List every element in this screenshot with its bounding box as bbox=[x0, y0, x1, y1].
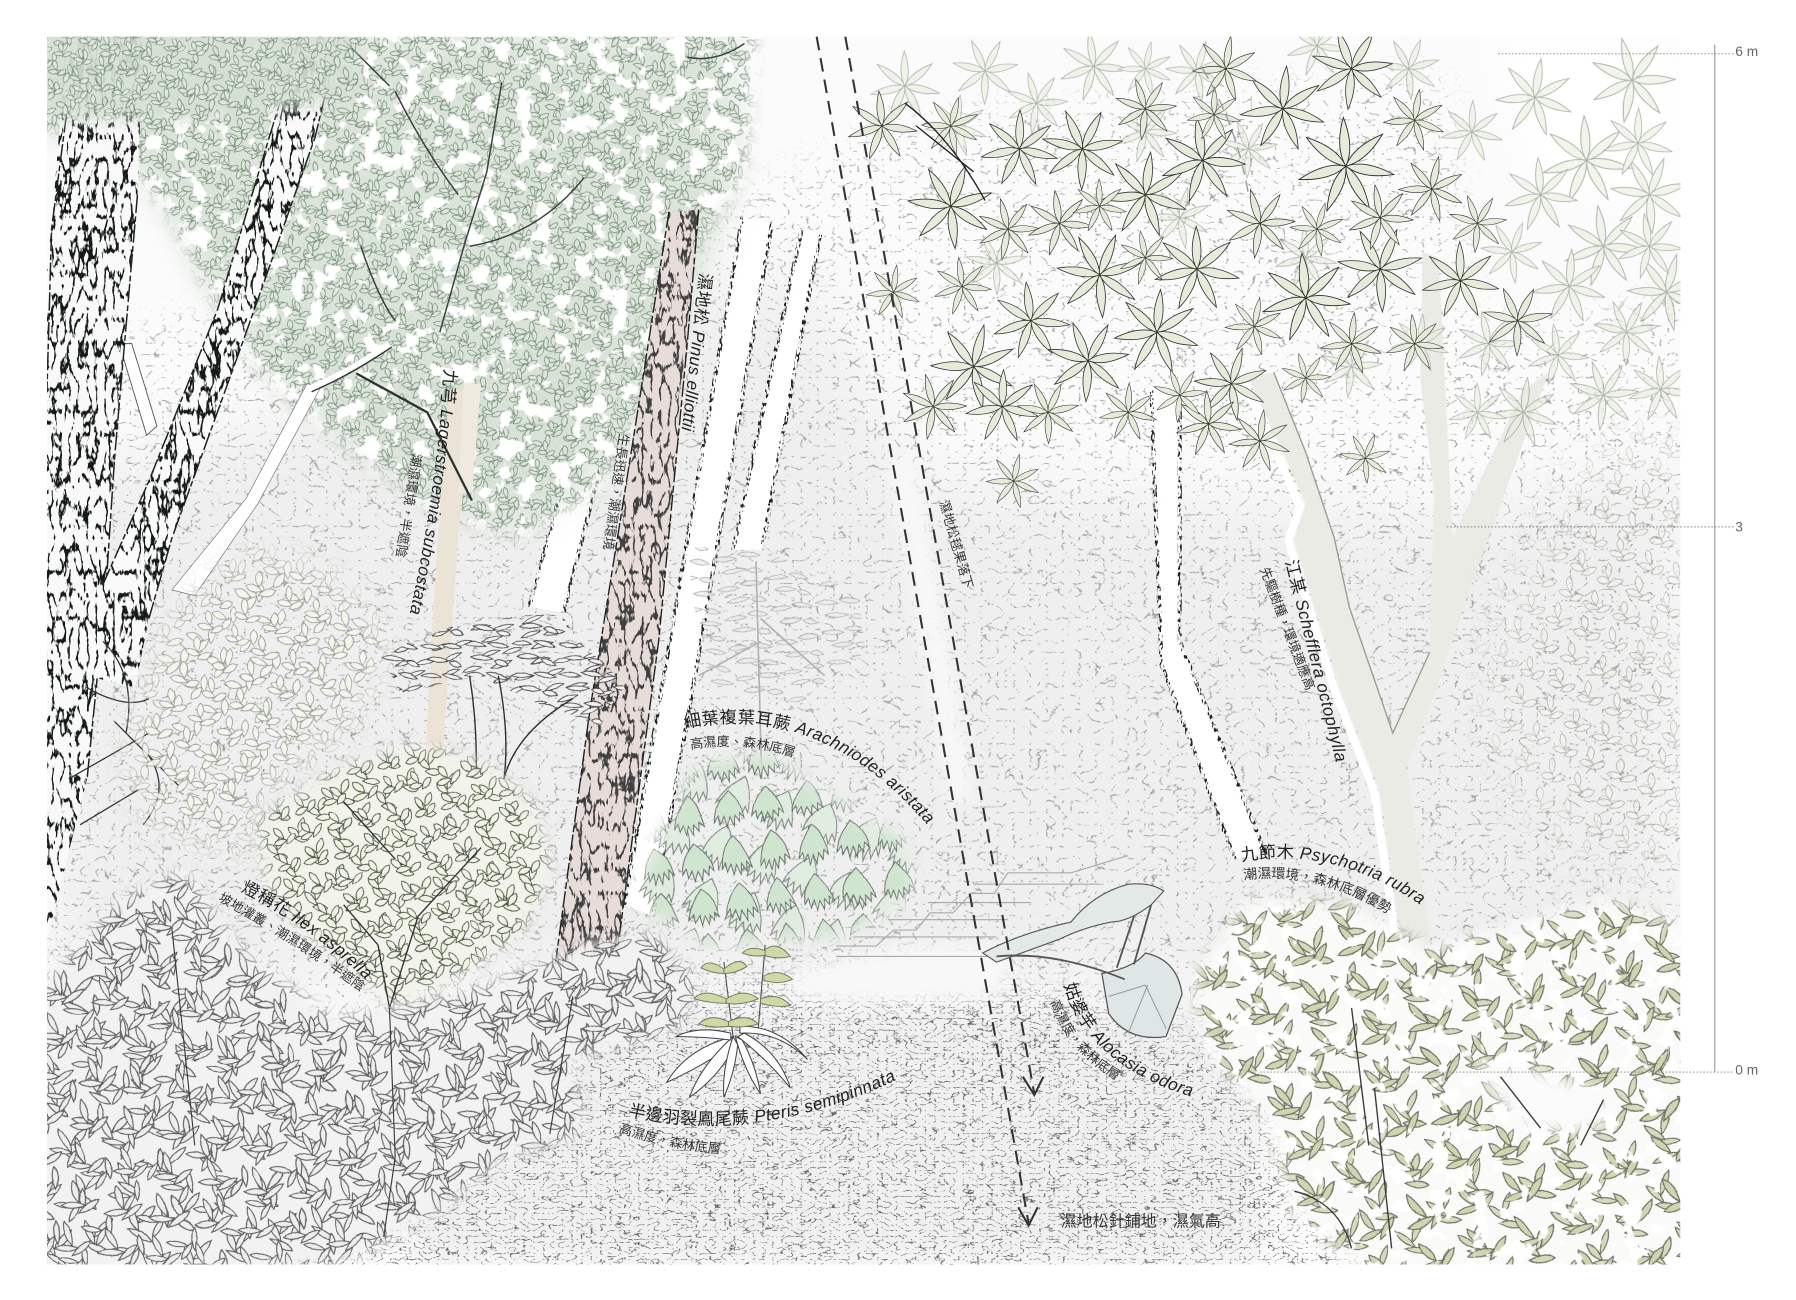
label: 3: 3 bbox=[1735, 519, 1743, 534]
trunk: left pine bbox=[46, 36, 143, 939]
Lagerstroemia trunk bbox=[425, 384, 481, 762]
note: Schefflera octophylla: 先驅樹種，環境適應高 bbox=[1259, 568, 1316, 690]
Ilex asprella shrub bbox=[229, 722, 573, 1031]
Arachniodes fern bbox=[619, 744, 939, 951]
trunk: diagonal pine bbox=[86, 37, 339, 687]
faint shrub behind Ilex bbox=[103, 538, 424, 882]
note: pine cones fall: 濕地松毬果落下 bbox=[939, 500, 974, 587]
undergrowth shrub (left, dark) bbox=[34, 848, 722, 1283]
label: Arachniodes aristata: 細葉複葉耳蕨 Arachniodes aristata bbox=[682, 707, 940, 828]
schefflera canopy: faded leaves bbox=[865, 11, 1719, 457]
pine needle fall: dashed line and arrow bbox=[817, 37, 1038, 1226]
note: Alocasia odora: 高濕度，森林底層 bbox=[1047, 998, 1123, 1083]
faint foliage (right edge) bbox=[1466, 412, 1684, 893]
green canopy (left) bbox=[47, 37, 780, 564]
label: Schefflera octophylla: 江某 Schefflera octophylla bbox=[1284, 560, 1346, 762]
dark sapling bbox=[378, 616, 624, 790]
label: Ilex asprella: 燈稱花 Ilex asprella bbox=[239, 877, 377, 983]
stone stairs bbox=[836, 856, 1128, 956]
canopy overlay on pine tops bbox=[47, 37, 368, 140]
Pinus elliottii trunk (pink) bbox=[554, 210, 699, 985]
label: Pinus elliottii: 濕地松 Pinus elliottii bbox=[682, 274, 714, 432]
Psychotria rubra shrub (right, olive) bbox=[1180, 882, 1707, 1294]
note: Psychotria rubra: 潮濕環境，森林底層優勢 bbox=[1243, 866, 1394, 917]
note: pine needle ground cover: 濕地松針鋪地，濕氣高 bbox=[1061, 1213, 1221, 1231]
trunk: tangled base lines at left bbox=[69, 641, 183, 825]
label: Lagerstroemia subcostata: 九芎 Lagerstroemia subcostata bbox=[410, 369, 458, 614]
label: 6 m: 6 m bbox=[1735, 44, 1758, 59]
dark branches in canopy bbox=[905, 69, 1248, 200]
height scale bbox=[1260, 44, 1758, 1077]
note: Pteris semipinnata: 高濕度，森林底層 bbox=[618, 1120, 722, 1156]
Pteris semipinnata bbox=[667, 945, 808, 1097]
note: Ilex asprella: 坡地灌叢、潮濕環境，半遮陰 bbox=[216, 890, 368, 994]
Alocasia odora bbox=[983, 884, 1182, 1038]
label: Pteris semipinnata: 半邊羽裂鳳尾蕨 Pteris semipinnata bbox=[627, 1065, 898, 1129]
schefflera canopy: dark leaf clusters bbox=[844, 13, 1567, 517]
falling pine cones: dashed line and arrow bbox=[845, 37, 1043, 1095]
note: Arachniodes aristata: 高濕度、森林底層 bbox=[689, 734, 797, 760]
note: Lagerstroemia subcostata: 潮濕環境，半遮陰 bbox=[395, 454, 423, 558]
label: Psychotria rubra: 九節木 Psychotria rubra bbox=[1242, 844, 1424, 904]
light path on forest floor bbox=[790, 946, 1008, 1002]
faint grey sapling bbox=[687, 548, 865, 779]
Schefflera octophylla trunk bbox=[1243, 252, 1549, 959]
note: Pinus elliottii: 生長迅速，潮濕環境 bbox=[602, 434, 630, 550]
label: 0 m: 0 m bbox=[1735, 1062, 1758, 1077]
white background trunks bbox=[529, 218, 1266, 916]
label: Alocasia odora: 姑婆芋 Alocasia odora bbox=[1060, 980, 1196, 1101]
branches (white) bbox=[119, 344, 472, 596]
